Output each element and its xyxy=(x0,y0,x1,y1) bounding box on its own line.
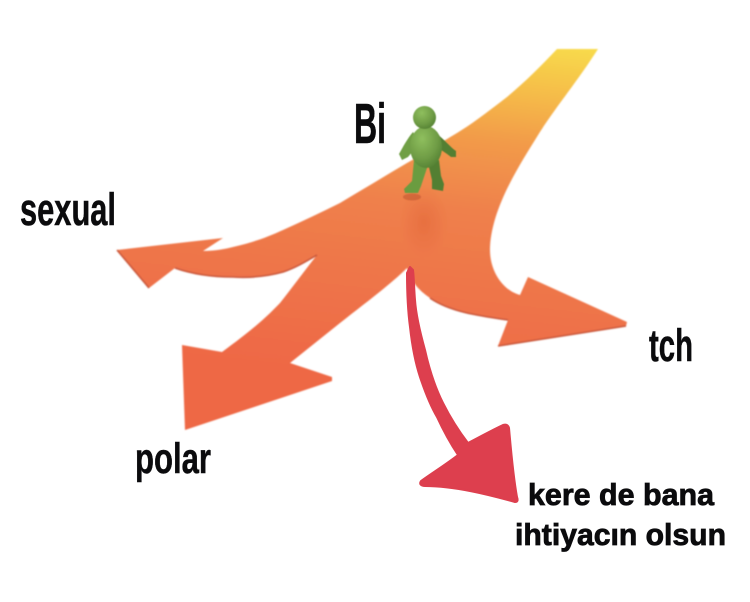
caption line 1: kere de bana xyxy=(528,477,715,512)
foot shadow xyxy=(403,194,421,200)
torso xyxy=(410,126,442,168)
label: Bi: Bi xyxy=(354,92,386,156)
right arm xyxy=(434,134,456,157)
right leg xyxy=(428,160,444,191)
forked road arrows xyxy=(117,49,627,430)
figure: green person xyxy=(399,106,456,200)
red drawn arrow xyxy=(407,267,518,502)
figure reflection xyxy=(400,186,448,258)
label: sexual: sexual xyxy=(20,184,116,235)
label: polar: polar xyxy=(135,435,211,483)
head xyxy=(413,106,436,129)
label: tch: tch xyxy=(649,320,693,371)
shaded edges xyxy=(117,250,626,346)
left arm xyxy=(399,132,420,160)
left leg xyxy=(404,160,428,193)
caption line 2: ihtiyacın olsun xyxy=(515,517,726,552)
road surface xyxy=(117,49,627,430)
